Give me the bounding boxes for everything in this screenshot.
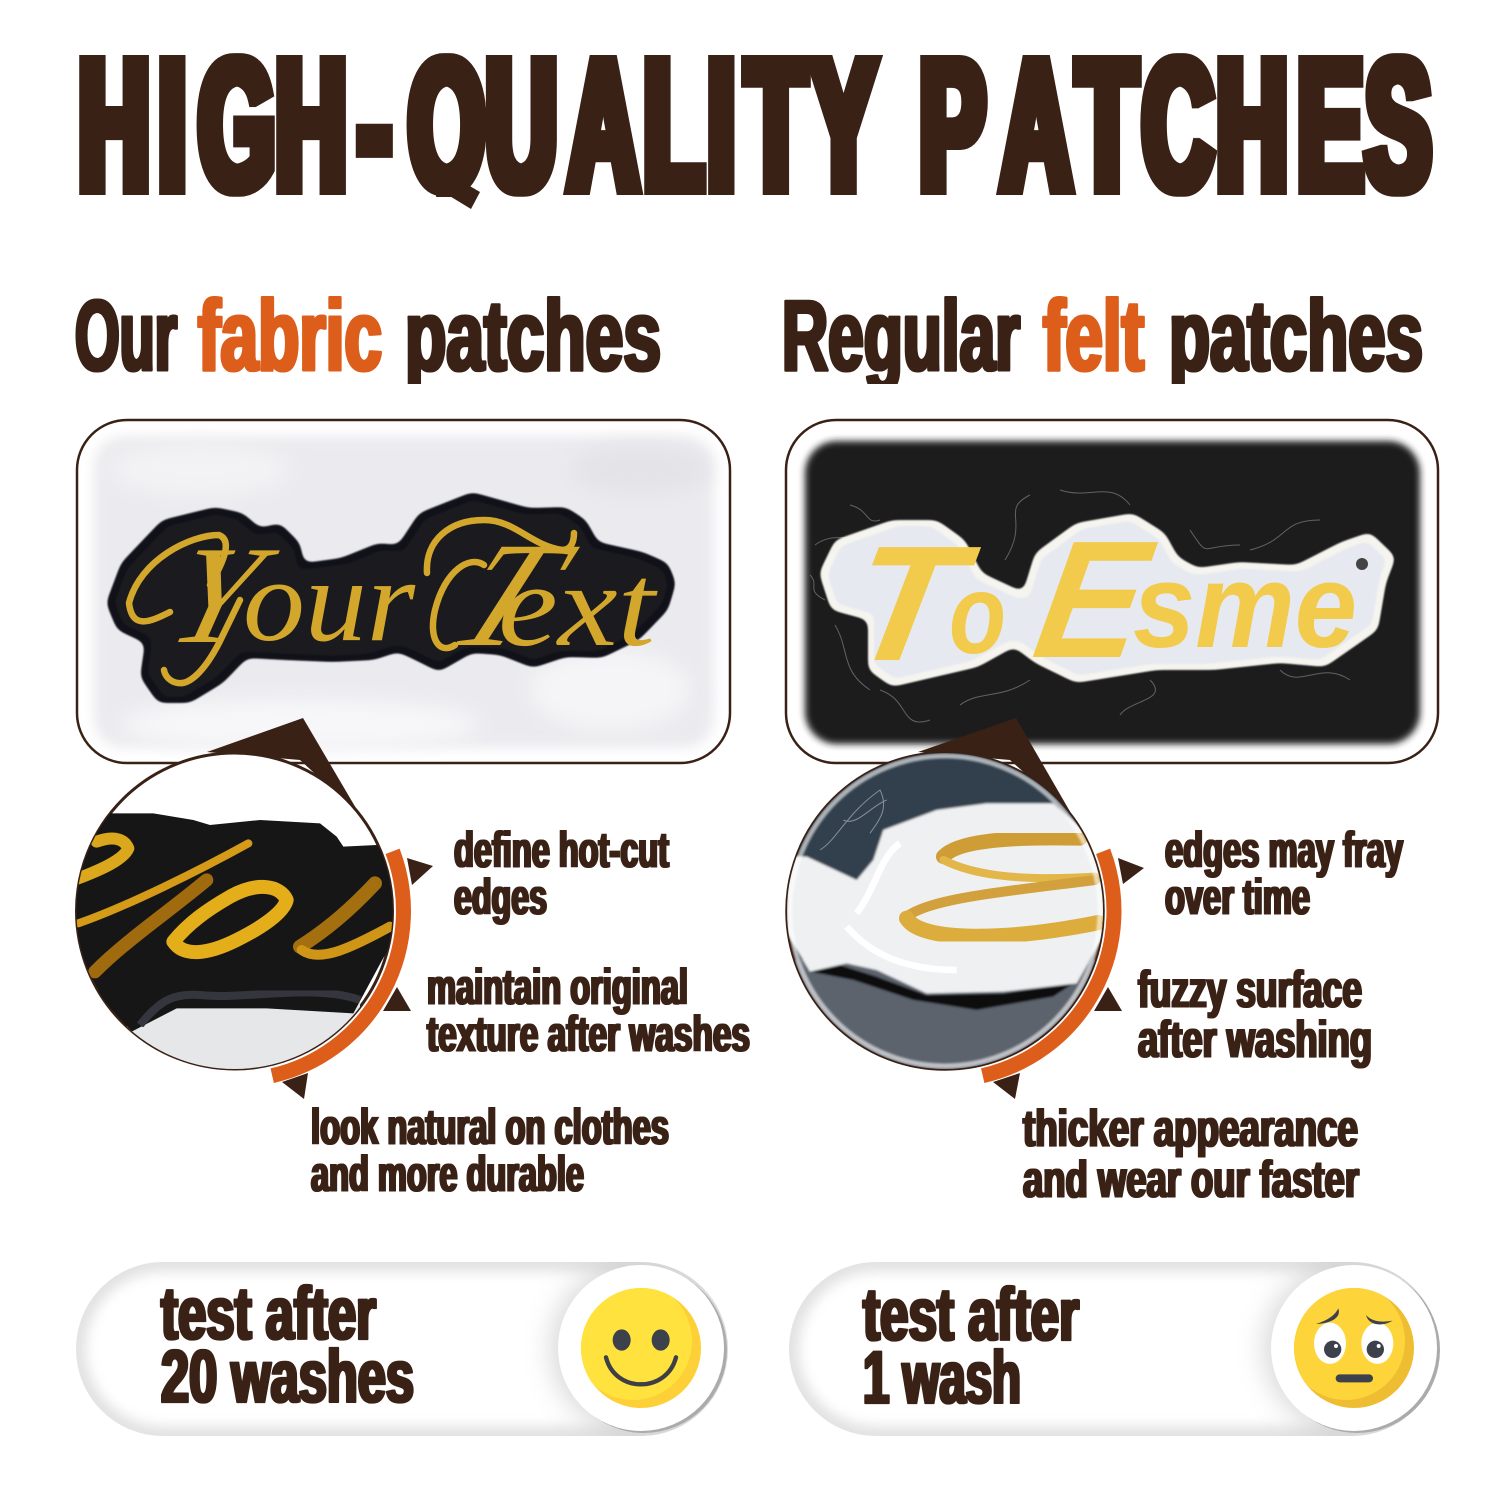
panel: fabric patch photo [77, 420, 730, 763]
frayed fibers [810, 490, 1350, 722]
callout: look natural [311, 1099, 669, 1202]
heading: our fabric patches: patches [405, 280, 661, 392]
icon: worried face [1271, 1265, 1440, 1433]
accent arc: fabric [272, 851, 403, 1076]
patch lettering [129, 512, 659, 683]
patch lettering [837, 506, 1357, 696]
callout: look natural: and more durable [311, 1146, 584, 1202]
callout: define hot-cut edges: define hot-cut [454, 822, 669, 878]
pill text: test after [161, 1272, 376, 1355]
callout: define hot-cut edges: edges [454, 869, 547, 925]
title: PATCHES [920, 22, 1431, 229]
pill text: 1 wash [863, 1336, 1021, 1419]
pill: test after 1 wash [789, 1262, 1440, 1436]
callout: fuzzy surface [1138, 961, 1372, 1069]
patch lettering: E [1024, 506, 1165, 693]
callout: edges may fray: over time [1165, 869, 1310, 925]
patch lettering: T [427, 512, 597, 678]
callout: edges may fray [1165, 822, 1403, 925]
patch lettering: Y [157, 517, 289, 672]
heading: our fabric patches: Our [75, 280, 177, 392]
heading: regular felt patches: Regular [782, 280, 1020, 392]
patch: white felt shape [819, 513, 1396, 687]
arrow markers: felt [993, 858, 1144, 1099]
patch lettering: sme [1133, 539, 1357, 673]
title: HIGH-QUALITY [79, 22, 876, 229]
magnifier pointer: fabric [207, 718, 360, 815]
patch lettering: our [243, 535, 416, 666]
callout: define hot-cut edges [454, 822, 669, 925]
pill text: test after [863, 1273, 1079, 1356]
callout: maintain original texture [427, 959, 750, 1062]
callout: thicker appearance: and wear our faster [1023, 1151, 1359, 1209]
title [79, 22, 1431, 247]
patch lettering: ext [498, 540, 659, 671]
icon: smiling face [558, 1265, 727, 1433]
patch lettering: o [949, 551, 1006, 677]
pill text [863, 1273, 1079, 1419]
arrow markers: fabric [282, 858, 433, 1099]
panel: felt patch photo [786, 420, 1438, 763]
callout: thicker appearance: thicker appearance [1023, 1100, 1358, 1158]
callout: thicker appearance [1023, 1100, 1359, 1209]
heading: our fabric patches [75, 280, 661, 392]
callout: fuzzy surface: after washing [1138, 1011, 1372, 1069]
magnifier: felt close-up [76, 750, 1440, 1436]
patch lettering: T [837, 512, 988, 696]
pill text: 20 washes [161, 1335, 414, 1418]
magnifier: fabric close-up [73, 753, 397, 1073]
callout: maintain original texture: texture after washes [427, 1006, 750, 1062]
callout: look natural: look natural on clothes [311, 1099, 669, 1155]
patch hole [1356, 558, 1368, 570]
heading: our fabric patches: fabric [198, 280, 382, 392]
pill: test after 20 washes [76, 1262, 728, 1436]
magnifier pointer: felt [918, 718, 1072, 815]
patch: black fabric shape [106, 492, 676, 703]
callout: fuzzy surface: fuzzy surface [1138, 961, 1362, 1019]
heading: regular felt patches: felt [1043, 280, 1144, 392]
heading: regular felt patches [782, 280, 1423, 392]
callout: maintain original texture: maintain original [427, 959, 688, 1015]
accent arc: felt [983, 851, 1114, 1076]
pill text [161, 1272, 414, 1418]
